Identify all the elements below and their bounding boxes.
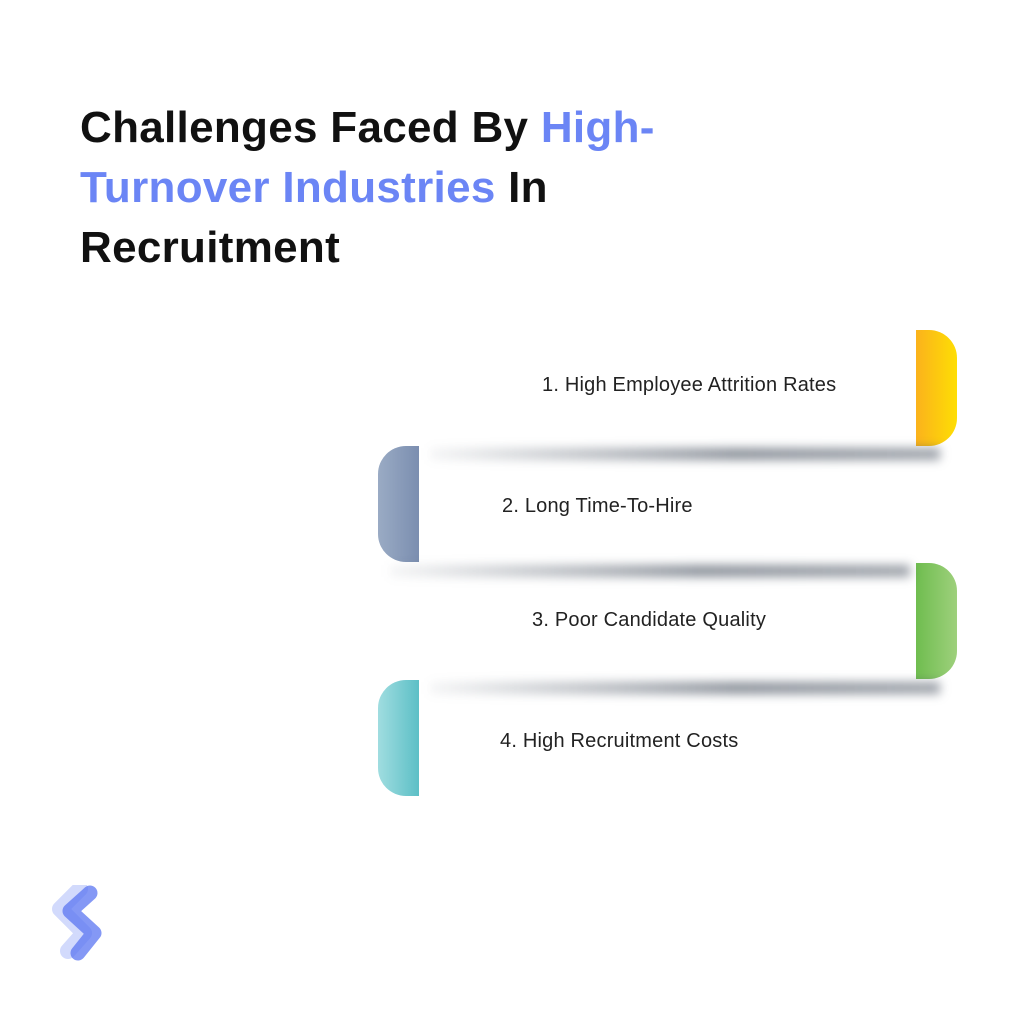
logo: [52, 885, 102, 960]
text 4: 4. High Recruitment Costs: [500, 730, 738, 752]
item 4: [378, 680, 916, 796]
tab: teal: [378, 680, 419, 796]
title: Turnover Industries In: [80, 163, 548, 212]
tab: slate: [378, 446, 419, 562]
item 2: [378, 446, 916, 562]
text 3: 3. Poor Candidate Quality: [532, 609, 766, 631]
item 1: [418, 330, 957, 446]
text 1: 1. High Employee Attrition Rates: [542, 374, 836, 396]
title: Recruitment: [80, 223, 340, 272]
tab: green: [916, 563, 957, 679]
shadow 3: [430, 682, 940, 694]
title: Challenges Faced By High-: [80, 103, 655, 152]
shadow 2: [390, 565, 910, 577]
title: [80, 103, 655, 272]
tab: yellow: [916, 330, 957, 446]
item 3: [418, 563, 957, 679]
text 2: 2. Long Time-To-Hire: [502, 495, 693, 517]
shadow 1: [430, 448, 940, 460]
